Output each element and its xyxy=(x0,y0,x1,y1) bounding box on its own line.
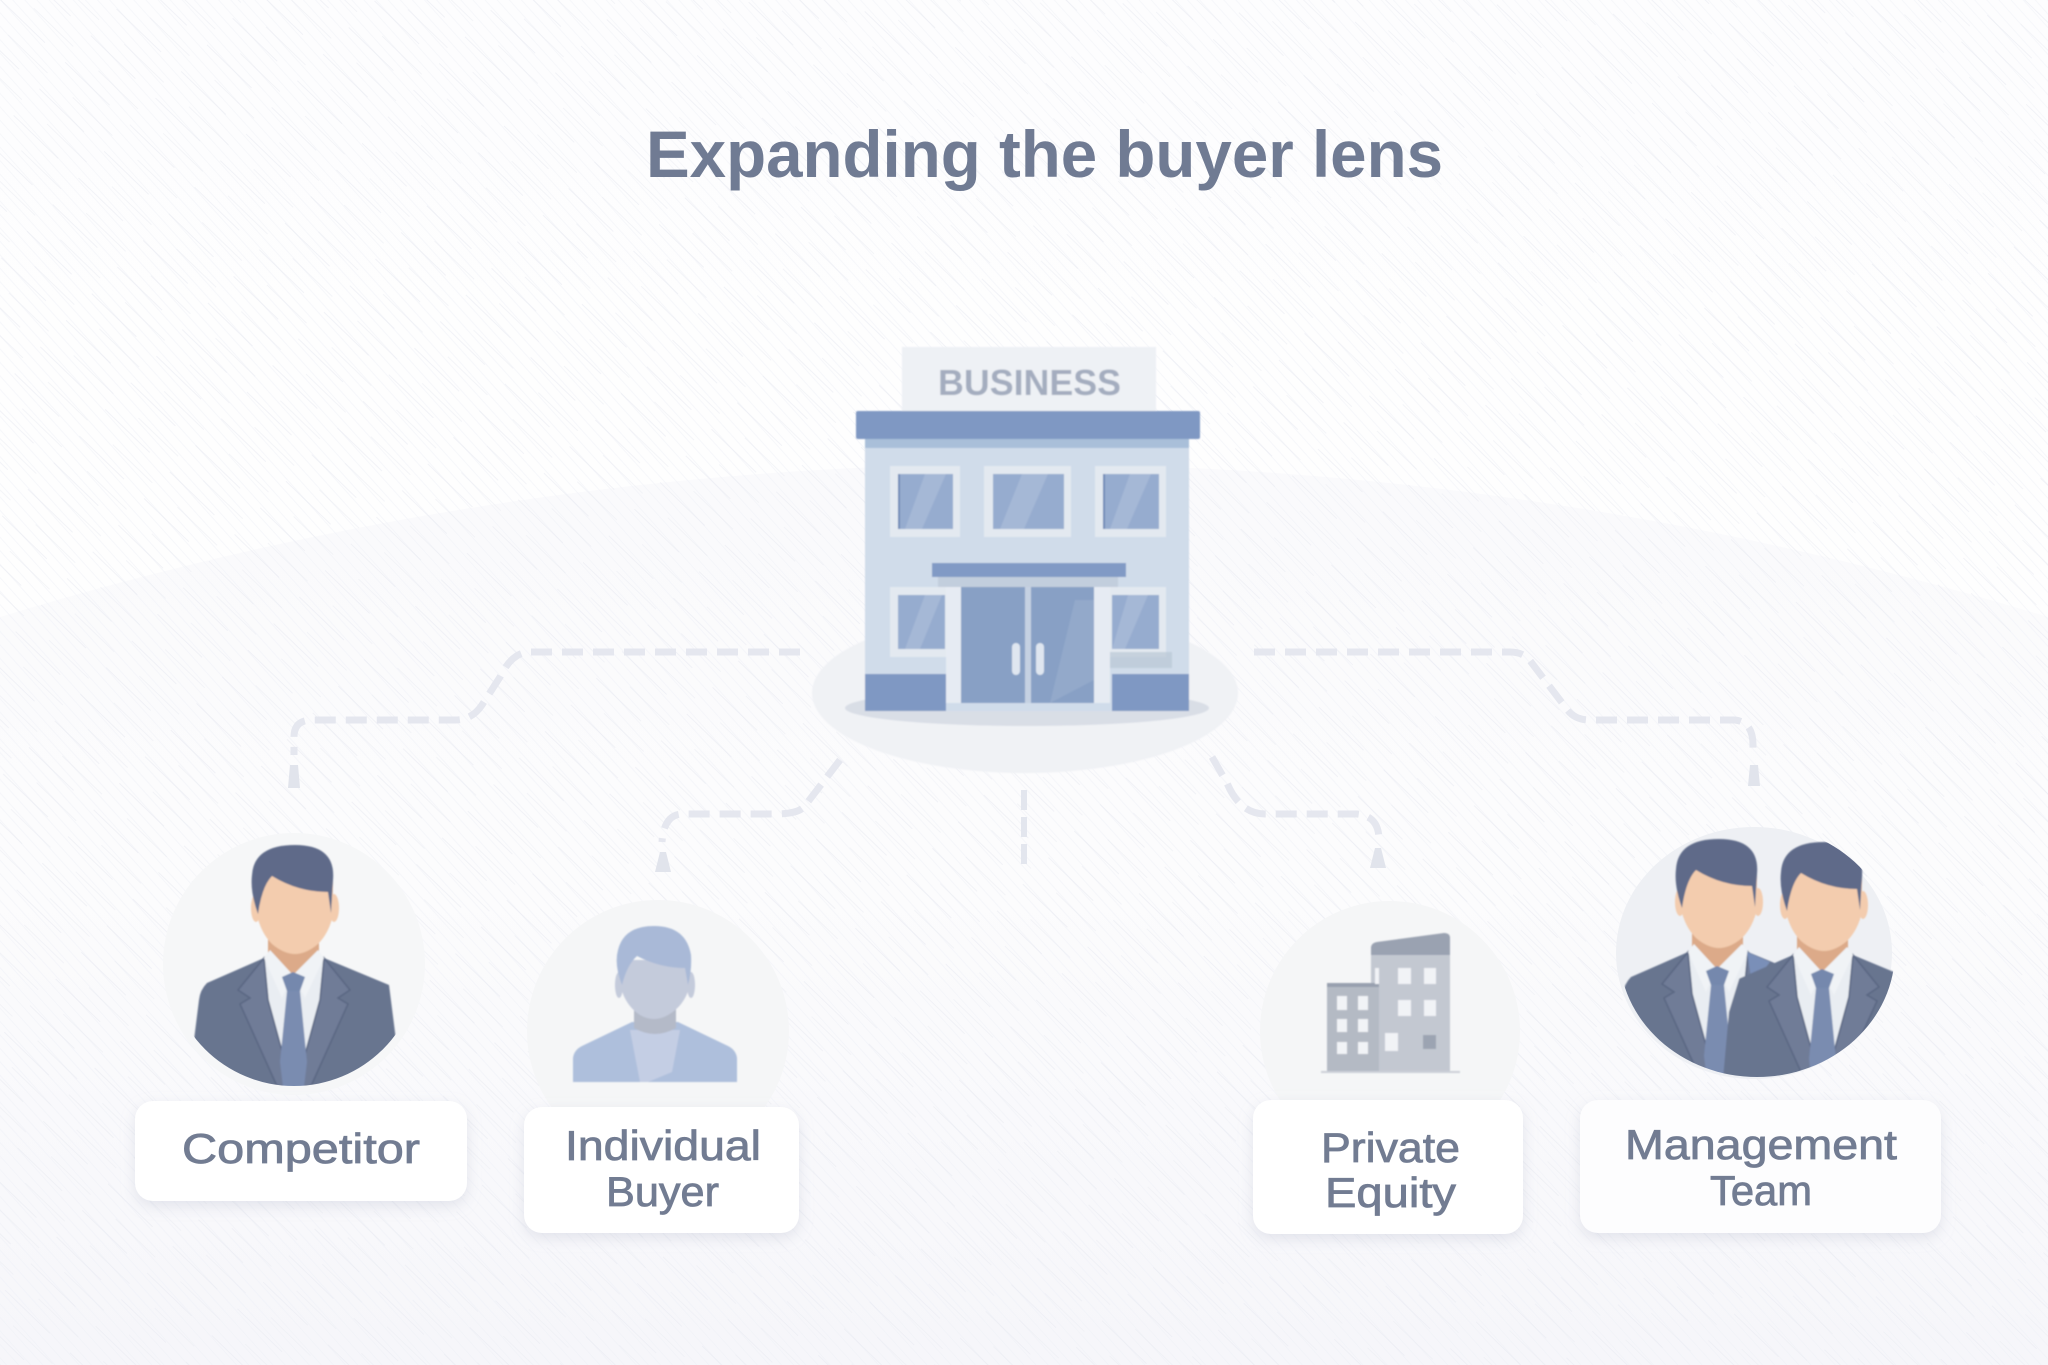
icon: office buildings xyxy=(1321,933,1460,1073)
management label card: Team xyxy=(1710,1167,1812,1214)
buyer: competitor xyxy=(135,833,467,1201)
base plinths xyxy=(865,652,1189,711)
lower windows xyxy=(890,587,1166,657)
buyer: management team xyxy=(1580,827,1941,1233)
private equity backdrop xyxy=(1260,901,1520,1161)
door canopy xyxy=(932,563,1126,587)
building wall xyxy=(865,439,1189,711)
buyer: individual buyer xyxy=(524,900,799,1233)
competitor label card: Competitor xyxy=(182,1125,420,1172)
competitor backdrop xyxy=(163,833,425,1095)
individual backdrop xyxy=(527,900,789,1162)
connector: centre vertical xyxy=(1021,790,1027,866)
icon: competitor businessman xyxy=(186,845,402,1095)
connector: business to private equity xyxy=(1212,757,1386,868)
building shadow xyxy=(845,690,1209,726)
management label card xyxy=(1580,1100,1941,1233)
building ground blob xyxy=(812,613,1238,773)
door frame xyxy=(946,587,1110,703)
competitor label card xyxy=(135,1101,467,1201)
wall top strip xyxy=(865,439,1189,448)
icon: individual silhouette xyxy=(573,926,737,1082)
building sign xyxy=(902,347,1156,411)
private equity label card: Equity xyxy=(1325,1169,1456,1216)
sign text: BUSINESS xyxy=(938,362,1121,403)
management label card: Management xyxy=(1625,1121,1897,1168)
title: Expanding the buyer lens xyxy=(646,117,1443,191)
icon: business building xyxy=(812,347,1238,773)
connector: business to competitor xyxy=(288,652,800,788)
connector: business to management team xyxy=(1254,652,1760,786)
private equity label card xyxy=(1253,1100,1523,1234)
connector: business to individual buyer xyxy=(655,760,840,872)
doors xyxy=(961,587,1094,703)
private equity label card: Private xyxy=(1321,1124,1460,1171)
individual label card: Buyer xyxy=(606,1168,719,1215)
individual label card: Individual xyxy=(565,1122,761,1169)
icon: two businessmen xyxy=(1624,838,1894,1077)
roof xyxy=(856,411,1200,439)
individual label card xyxy=(524,1107,799,1233)
upper windows xyxy=(890,466,1166,537)
management backdrop xyxy=(1616,827,1892,1079)
buyer: private equity xyxy=(1253,901,1523,1234)
